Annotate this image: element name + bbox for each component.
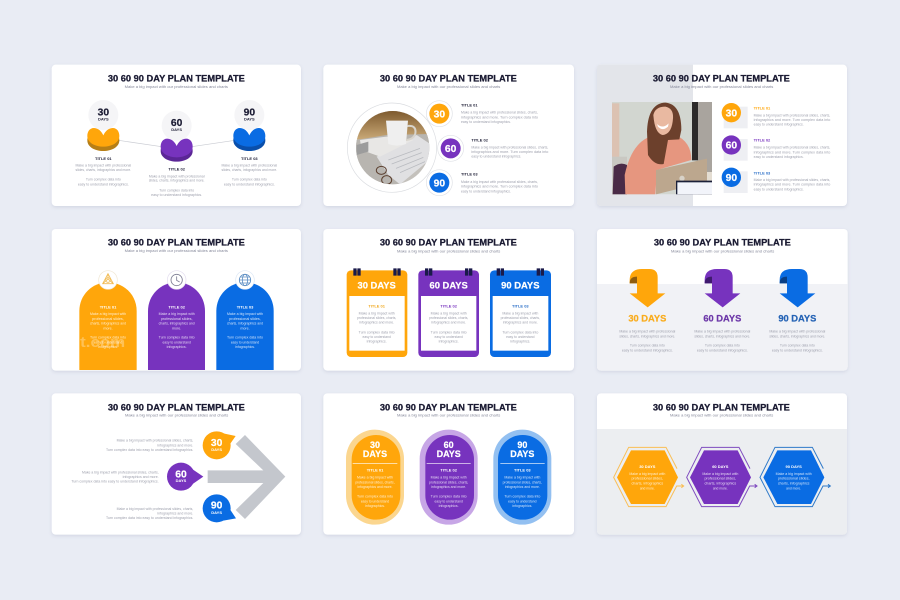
oval: 60 days: TITLE 02 (440, 467, 458, 472)
item: 30: TITLE 01 (754, 105, 771, 110)
item: 30 days (75, 100, 131, 186)
hexagon: 90 days: 90 DAYS (786, 464, 802, 469)
hexagon: 90 days (760, 447, 830, 507)
oval: 60 days: professional slides, charts, (429, 480, 468, 484)
bubble: 90 days: DAYS (211, 510, 222, 515)
calendar: 60 days: 60 DAYS (429, 280, 468, 290)
item: 90 days: easy to understand infographics. (224, 182, 275, 186)
calendar: 90 days (490, 268, 551, 357)
calendar: 30 days: 30 DAYS (357, 280, 396, 290)
item: 60: easy to understand infographics. (754, 155, 804, 159)
arch: title 02: easy to understand (162, 340, 191, 344)
oval: 90 days: Turn complex data into (504, 494, 540, 498)
item: 30 days: slides, charts, infographics and more. (75, 168, 131, 172)
arrow item: 60 days: 60 DAYS (703, 314, 741, 324)
hexagon: 30 days (614, 447, 684, 507)
arrow item: 30 days: slides, charts, infographics and more. (619, 334, 675, 338)
photo: smiling woman at laptop (612, 102, 712, 194)
item: 30: Make a big impact with professional slides, charts, (754, 113, 830, 117)
badge: 90 (426, 170, 452, 196)
oval: 60 days: Make a big impact with (431, 476, 467, 480)
title: 30 60 90 DAY PLAN TEMPLATE (108, 74, 245, 84)
text: title 02: Make a big impact with professional slides, charts, (471, 145, 548, 149)
watermark: t.com (80, 335, 125, 351)
item: 90 days: slides, charts, infographics and more. (221, 168, 277, 172)
arch: title 01: Make a big impact with (90, 312, 126, 316)
arrow item: 60 days: slides, charts, infographics and more. (694, 334, 750, 338)
oval: 90 days: DAYS (510, 449, 534, 459)
arch: title 02 (148, 271, 205, 370)
text: title 03: TITLE 03 (461, 172, 478, 177)
text: title 01: easy to understand infographics. (461, 120, 511, 124)
calendar: 90 days: infographics and more. (503, 321, 538, 325)
oval: 30 days: TITLE 01 (367, 467, 384, 472)
arrow item: 90 days: slides, charts, infographics and more. (769, 334, 825, 338)
oval: 90 days: Make a big impact with (504, 476, 540, 480)
hexagon: 30 days: and more. (640, 486, 655, 490)
arch: title 01 (79, 271, 137, 370)
arrow item: 30 days: 30 DAYS (628, 314, 666, 324)
text: title 02: TITLE 02 (471, 138, 489, 143)
text: 30 days: Turn complex data into easy to understand infographics. (106, 448, 193, 452)
item: 60 days: easy to understand infographics. (151, 193, 202, 197)
oval: 60 days: infographics and more. (431, 485, 466, 489)
arch: title 01: Turn complex data into (90, 336, 126, 340)
text: 90 days: Turn complex data into easy to understand infographics. (106, 516, 193, 520)
text: 60 days: Make a big impact with professional slides, charts, (82, 470, 159, 474)
photo: cup and papers (347, 103, 437, 192)
hexagon: 60 days: and more. (713, 486, 728, 490)
item: 90 (722, 168, 830, 193)
item: 90 days: 90 (244, 107, 255, 118)
arch: title 03: Make a big impact with (227, 312, 263, 316)
subtitle: Make a big impact with our professional slides and charts (125, 248, 228, 253)
item: 60 (722, 135, 830, 161)
title: 30 60 90 DAY PLAN TEMPLATE (380, 402, 517, 412)
oval: 30 days: infographics. (365, 504, 385, 508)
item: 30 days: Make a big impact with professional (75, 164, 131, 168)
arch: title 03: professional slides, (229, 317, 261, 321)
item: 30 (722, 103, 830, 128)
calendar: 90 days: Make a big impact with (502, 311, 538, 315)
item: 60 days: slides, charts, infographics and more. (149, 179, 204, 183)
text: 90 days: Make a big impact with professional slides, charts, (117, 507, 193, 511)
text: 60 days: Turn complex data into easy to understand infographics. (71, 480, 159, 484)
arch: title 03: Turn complex data into (227, 336, 263, 340)
oval: 90 days: infographics and more. (505, 485, 540, 489)
text: 30 days (106, 439, 193, 452)
badge: 60: 60 (445, 144, 457, 155)
oval: 60 days: infographics. (439, 504, 459, 508)
bubble: 90 days (203, 494, 236, 522)
arch: title 03: charts, infographics and (227, 322, 263, 326)
calendar: 60 days: infographics. (439, 340, 459, 344)
oval: 30 days (346, 430, 404, 525)
panel: slide 8 ovals (323, 393, 574, 535)
text: 60 days: infographics and more. (123, 475, 159, 479)
calendar: 60 days: TITLE 02 (440, 303, 458, 308)
calendar: 60 days: Turn complex data into (431, 330, 467, 334)
item: 90 days (221, 100, 277, 186)
hexagon: 30 days: professional slides, (631, 477, 663, 481)
title: 30 60 90 DAY PLAN TEMPLATE (654, 238, 791, 248)
arch: title 01: professional slides, (92, 317, 124, 321)
calendar: 90 days: 90 DAYS (501, 280, 539, 290)
panel: slide 9 hexagons (597, 393, 847, 535)
calendar: 60 days: professional slides, charts, (429, 316, 468, 320)
calendar: 60 days: Make a big impact with (431, 311, 467, 315)
oval: 60 days: DAYS (437, 449, 461, 459)
oval: 90 days: TITLE 03 (514, 467, 531, 472)
arrow item: 30 days (619, 269, 676, 353)
item: 60: TITLE 02 (754, 138, 771, 143)
item: 60 days: Turn complex data into (159, 188, 194, 192)
badge: 60 (438, 135, 464, 161)
calendar: 60 days: easy to understand (434, 335, 463, 339)
hexagon: 30 days: charts, infographics (631, 482, 663, 486)
item: 90 days: DAYS (244, 116, 255, 121)
calendar: 30 days: infographics and more. (359, 321, 394, 325)
subtitle: Make a big impact with our professional slides and charts (671, 248, 774, 253)
arch: title 01: charts, infographics and (90, 322, 126, 326)
badge: 30: 30 (434, 109, 445, 120)
text: title 02: infographics and more. Turn complex data into (471, 150, 548, 154)
calendar: 30 days: TITLE 01 (368, 303, 386, 308)
oval: 60 days: easy to understand (434, 499, 463, 503)
item: 60: Make a big impact with professional slides, charts, (754, 146, 830, 150)
oval: 30 days: Make a big impact with (357, 476, 393, 480)
oval: 90 days: professional slides, charts, (503, 480, 542, 484)
arch: title 03: TITLE 03 (237, 304, 254, 309)
title: 30 60 90 DAY PLAN TEMPLATE (653, 74, 790, 84)
bubble: 60 days (167, 463, 203, 491)
item: 60: 60 (726, 141, 737, 152)
arch: title 01: more. (103, 326, 113, 330)
text: 30 days: infographics and more. (157, 443, 193, 447)
item: 30 days: TITLE 01 (95, 156, 112, 161)
hexagon: 30 days: Make a big impact with (629, 472, 665, 476)
arrow item: 90 days: Make a big impact with professional (769, 330, 826, 334)
arch: title 01: easy to understand (94, 340, 122, 344)
panel: slide 5 calendars (323, 229, 574, 371)
panel: slide 6 down arrows (597, 229, 848, 371)
arch: title 01: infographics. (98, 345, 118, 349)
item: 60 days: 60 (171, 118, 183, 129)
arch: title 03: more. (240, 326, 250, 330)
calendar: 90 days: easy to understand (506, 335, 534, 339)
oval: 90 days: 90 (517, 440, 527, 450)
item: 90: easy to understand infographics. (754, 187, 804, 191)
calendar: 30 days: professional slides, charts, (357, 316, 396, 320)
item: 60 days: Make a big impact with professional (149, 174, 205, 178)
item: 90: 90 (726, 173, 737, 184)
arch: title 02: charts, infographics and (159, 322, 195, 326)
panel: slide 3 photo list (597, 65, 847, 206)
subtitle: Make a big impact with our professional slides and charts (670, 84, 773, 89)
panel: slide 2 circle photo (323, 65, 574, 206)
hexagon: 90 days: Make a big impact with (776, 472, 812, 476)
bubble: 30 days: DAYS (211, 447, 222, 452)
arrow item: 60 days: Make a big impact with professional (694, 330, 751, 334)
hexagon: 60 days: 60 DAYS (712, 464, 729, 469)
text: title 01: infographics and more. Turn complex data into (461, 115, 538, 119)
arrow item: 60 days: Turn complex data into (705, 344, 740, 348)
badge: 30 (426, 101, 452, 127)
text: title 03: infographics and more. Turn complex data into (461, 185, 538, 189)
item: 60 days: DAYS (171, 127, 182, 132)
oval: 60 days (420, 430, 478, 525)
hexagon: 60 days: Make a big impact with (702, 472, 738, 476)
arch: title 02: Make a big impact with (159, 312, 195, 316)
item: 60: infographics and more. Turn complex data into (754, 150, 830, 154)
title: 30 60 90 DAY PLAN TEMPLATE (108, 238, 245, 248)
text: 90 days (106, 507, 193, 520)
arch: title 02: infographics. (167, 345, 187, 349)
arch: title 02: Turn complex data into (159, 336, 195, 340)
oval: 60 days: Turn complex data into (431, 494, 467, 498)
oval: 90 days: easy to understand (508, 499, 536, 503)
arrow item: 90 days (769, 269, 826, 353)
bubble: 30 days: 30 (211, 438, 223, 449)
arrow item: 60 days (694, 269, 751, 353)
calendar: 30 days: easy to understand (362, 335, 391, 339)
hexagon: 90 days: professional slides, (778, 477, 809, 481)
arrow item: 90 days: Turn complex data into (780, 344, 815, 348)
title: 30 60 90 DAY PLAN TEMPLATE (380, 238, 517, 248)
arrow item: 60 days: easy to understand infographics. (697, 349, 748, 353)
arch: title 02: more. (172, 326, 181, 330)
calendar: 90 days: professional slides, charts, (501, 316, 540, 320)
text: title 01: Make a big impact with professional slides, charts, (461, 111, 538, 115)
oval: 90 days (493, 430, 551, 525)
arrow item: 90 days: easy to understand infographics. (772, 349, 823, 353)
title: 30 60 90 DAY PLAN TEMPLATE (108, 402, 245, 412)
item: 30 days: easy to understand infographics. (78, 182, 129, 186)
oval: 90 days: infographics. (512, 504, 532, 508)
item: 30 days: Turn complex data into (86, 178, 121, 182)
subtitle: Make a big impact with our professional slides and charts (670, 413, 773, 418)
subtitle: Make a big impact with our professional slides and charts (397, 413, 500, 418)
calendar: 60 days: infographics and more. (431, 321, 466, 325)
item: 60 days (149, 111, 205, 197)
calendar: 90 days: infographics. (510, 340, 530, 344)
arch: title 01: TITLE 01 (100, 304, 117, 309)
text: title 02: easy to understand infographics. (471, 155, 521, 159)
panel: slide 1 pies (52, 65, 301, 206)
item: 30 days: 30 (98, 107, 109, 118)
item: 30 days: DAYS (98, 116, 109, 121)
item: 60 days: TITLE 02 (168, 167, 186, 172)
text: title 01: TITLE 01 (461, 103, 478, 108)
arrow item: 30 days: Make a big impact with professional (619, 330, 676, 334)
arch: title 03: infographics. (235, 345, 255, 349)
oval: 30 days: DAYS (363, 449, 387, 459)
panel: slide 7 big arrow (52, 393, 301, 535)
hexagon: 30 days: 30 DAYS (639, 464, 656, 469)
calendar: 90 days: Turn complex data into (502, 330, 538, 334)
oval: 30 days: 30 (370, 440, 380, 450)
calendar: 60 days (418, 268, 479, 357)
item: 90: Make a big impact with professional slides, charts, (754, 178, 830, 182)
bubble: 90 days: 90 (211, 501, 223, 512)
title: 30 60 90 DAY PLAN TEMPLATE (653, 402, 790, 412)
subtitle: Make a big impact with our professional slides and charts (125, 413, 228, 418)
item: 30: infographics and more. Turn complex data into (754, 118, 830, 122)
connector lines (118, 140, 235, 147)
item: 90 days: TITLE 03 (241, 156, 258, 161)
text: title 03 (461, 172, 538, 193)
item: 90: TITLE 03 (754, 170, 771, 175)
bubble: 30 days (203, 431, 236, 459)
arrow item: 30 days: easy to understand infographics. (622, 349, 673, 353)
text: title 02 (471, 138, 548, 159)
text: title 01 (461, 103, 538, 124)
hexagon: 60 days: professional slides, (704, 477, 736, 481)
subtitle: Make a big impact with our professional slides and charts (125, 84, 228, 89)
hexagon: 90 days: charts, infographics (778, 482, 810, 486)
oval: 60 days: 60 (444, 440, 454, 450)
badge: 90: 90 (434, 178, 445, 189)
title: 30 60 90 DAY PLAN TEMPLATE (380, 74, 517, 84)
calendar: 90 days: TITLE 03 (512, 303, 529, 308)
item: 90 days: Make a big impact with professional (221, 164, 277, 168)
hexagon: 90 days: and more. (786, 486, 801, 490)
calendar: 30 days (347, 268, 407, 357)
arch: title 02: professional slides, (161, 317, 192, 321)
calendar: 30 days: Make a big impact with (359, 311, 395, 315)
bubble: 60 days: DAYS (176, 478, 187, 483)
oval: 30 days: infographics and more. (357, 485, 392, 489)
arch: title 03: easy to understand (231, 340, 259, 344)
subtitle: Make a big impact with our professional slides and charts (397, 248, 500, 253)
arch: title 02: TITLE 02 (168, 304, 186, 309)
arrow item: 30 days: Turn complex data into (630, 344, 665, 348)
item: 30: easy to understand infographics. (754, 123, 804, 127)
item: 90 days: Turn complex data into (232, 178, 267, 182)
calendar: 30 days: infographics. (367, 340, 387, 344)
subtitle: Make a big impact with our professional slides and charts (397, 84, 500, 89)
big gray arrow (208, 435, 285, 519)
panel: slide 4 arches (52, 229, 301, 371)
text: 60 days (71, 470, 159, 484)
calendar: 30 days: Turn complex data into (359, 330, 395, 334)
hexagon: 60 days (687, 447, 757, 507)
oval: 30 days: Turn complex data into (357, 494, 393, 498)
hexagon: 60 days: charts, infographics (704, 482, 736, 486)
oval: 30 days: professional slides, charts, (355, 480, 395, 484)
arch: title 03 (216, 271, 274, 370)
item: 30: 30 (726, 108, 737, 119)
oval: 30 days: easy to understand (361, 499, 389, 503)
text: 90 days: infographics and more. (157, 511, 193, 515)
bubble: 60 days: 60 (175, 469, 187, 480)
arrow item: 90 days: 90 DAYS (778, 314, 816, 324)
item: 90: infographics and more. Turn complex data into (754, 183, 830, 187)
text: 30 days: Make a big impact with professional slides, charts, (117, 439, 193, 443)
text: title 03: easy to understand infographics. (461, 189, 511, 193)
text: title 03: Make a big impact with professional slides, charts, (461, 180, 538, 184)
